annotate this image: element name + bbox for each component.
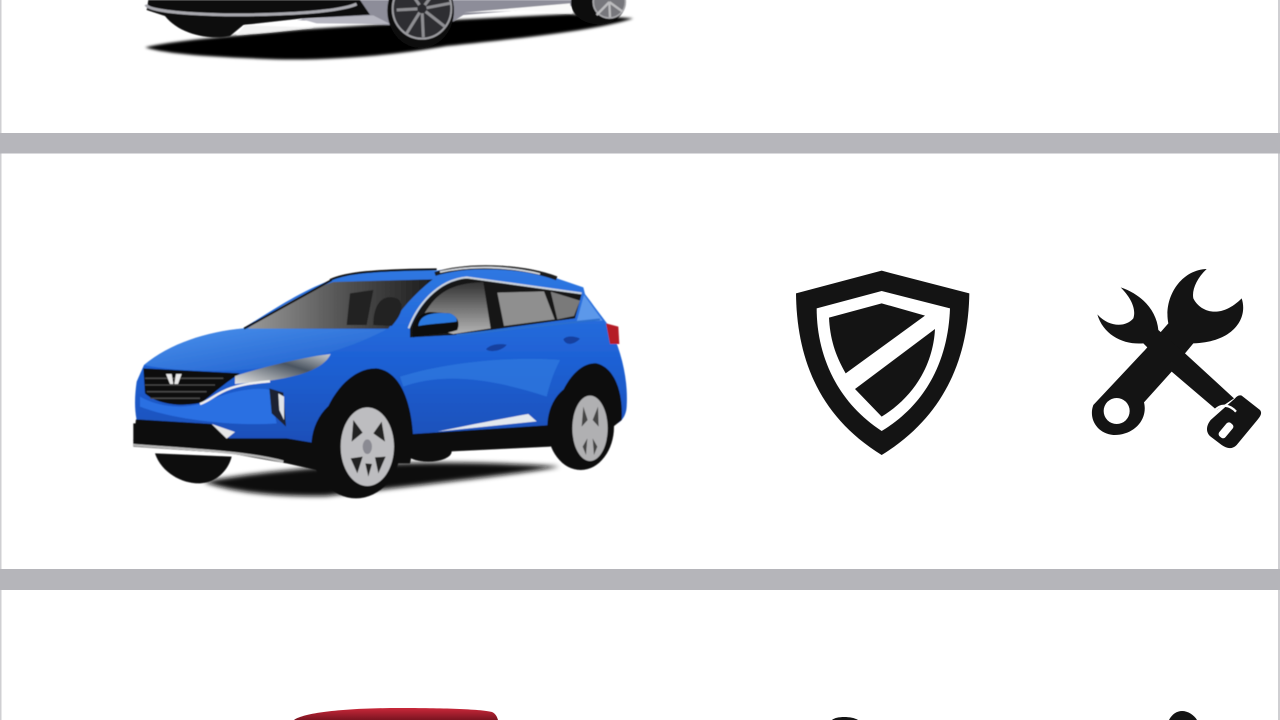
blue SUV main body xyxy=(135,268,627,443)
blue SUV rear wheel xyxy=(547,383,614,470)
blue SUV windshield xyxy=(247,279,433,329)
blue SUV chrome window trim xyxy=(409,277,582,328)
grey sedan air dam highlight xyxy=(300,15,390,24)
blue SUV seats xyxy=(347,290,402,326)
blue SUV side sill chrome xyxy=(435,414,537,432)
blue SUV bumper chrome lip xyxy=(133,445,283,462)
blue SUV rear window xyxy=(551,292,580,319)
far front tyre xyxy=(155,453,232,483)
blue SUV roof rail xyxy=(435,267,557,278)
blue SUV belt line xyxy=(457,319,600,335)
grey sedan ground shadow xyxy=(145,14,633,60)
blue SUV windshield edge xyxy=(244,280,332,329)
grey sedan front wheel xyxy=(387,0,454,48)
car: grey sedan cropped at top xyxy=(145,0,633,60)
icon: wrench tip cropped at bottom xyxy=(1169,711,1197,720)
grey sedan sill highlight xyxy=(463,3,572,13)
socket hole xyxy=(1217,421,1235,440)
blue SUV lower grille xyxy=(133,419,230,441)
blue SUV rear wheel arch xyxy=(552,363,622,450)
grey sedan chrome strip xyxy=(146,4,357,15)
grey sedan rear wheel xyxy=(571,0,626,24)
icon: crossed wrenches xyxy=(1092,269,1261,448)
icon: shield xyxy=(796,271,969,455)
blue SUV fascia highlight xyxy=(140,389,277,424)
blue SUV door highlight xyxy=(400,359,560,397)
blue SUV fog lamp chrome xyxy=(212,424,235,439)
far rear tyre xyxy=(405,442,452,462)
icon: shield tip cropped at bottom xyxy=(832,717,858,720)
divider band: upper xyxy=(0,133,1280,154)
wrench ring hole xyxy=(1104,398,1130,424)
blue SUV headlight xyxy=(235,354,331,384)
bumper vent highlight xyxy=(278,393,284,420)
grey sedan light gap xyxy=(237,25,313,35)
blue SUV hood xyxy=(144,328,387,371)
blue SUV door handles xyxy=(486,336,580,351)
car: red vehicle roof cropped at bottom xyxy=(294,708,498,720)
blue SUV rear quarter highlight xyxy=(577,295,603,322)
blue SUV side window frame xyxy=(410,278,582,337)
wrench to ring end xyxy=(1092,269,1243,435)
blue SUV lower black trim xyxy=(133,410,623,470)
socket end xyxy=(1207,395,1261,448)
blue SUV front side window xyxy=(425,282,491,334)
blue SUV front wheel arch xyxy=(315,368,413,463)
blue SUV roof line xyxy=(330,269,437,280)
blue SUV middle window xyxy=(497,291,555,326)
divider band: lower xyxy=(0,569,1280,590)
socket white arc xyxy=(1215,406,1236,412)
wrench to socket end xyxy=(1097,287,1234,410)
grille logo xyxy=(166,374,182,384)
grey sedan bumper xyxy=(147,0,370,37)
blue SUV front wheel xyxy=(311,395,401,498)
blue SUV ground shadow xyxy=(203,463,560,496)
blue SUV bumper side vent xyxy=(269,388,286,427)
blue SUV grille xyxy=(143,368,240,405)
blue SUV roof rail highlight xyxy=(440,267,540,274)
car: blue SUV xyxy=(133,267,627,498)
grey sedan lower body xyxy=(297,0,597,25)
blue SUV mirror xyxy=(412,312,459,337)
blue SUV headlight chrome xyxy=(200,381,270,404)
blue SUV tail light xyxy=(606,323,619,344)
